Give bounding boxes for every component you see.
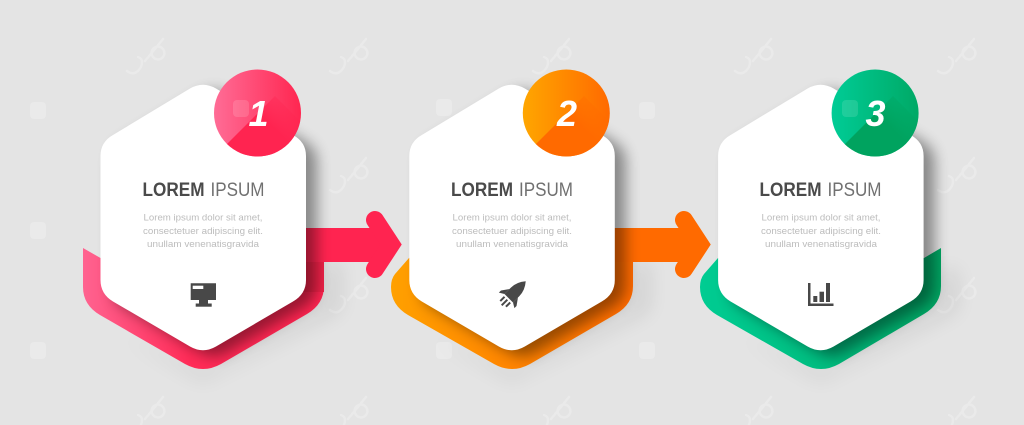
body text 1 — [143, 212, 263, 250]
body text 3: unullam venenatisgravida — [765, 239, 878, 250]
badge 2: 2 — [556, 93, 577, 134]
body text 1: consectetuer adipiscing elit. — [143, 226, 263, 237]
badge 3: 3 — [865, 93, 886, 134]
body text 3: consectetuer adipiscing elit. — [761, 226, 881, 237]
icon: rocket — [494, 273, 534, 313]
panel: card 3 — [718, 85, 924, 350]
panel: card 1 — [100, 85, 306, 350]
arrow 1 — [300, 220, 391, 269]
heading 2: IPSUM — [519, 179, 573, 201]
body text 1: Lorem ipsum dolor sit amet, — [144, 212, 262, 224]
body text 2: consectetuer adipiscing elit. — [452, 226, 572, 237]
step 1 band and arrow — [83, 220, 391, 380]
body text 3: Lorem ipsum dolor sit amet, — [762, 212, 880, 224]
heading 1: IPSUM — [210, 179, 264, 201]
body text 2: Lorem ipsum dolor sit amet, — [452, 212, 572, 224]
step 2 band and arrow — [391, 220, 700, 380]
heading 3 — [760, 179, 882, 201]
heading 3: IPSUM — [828, 179, 882, 201]
heading 1 — [142, 179, 264, 201]
body text 2: unullam venenatisgravida — [456, 239, 569, 250]
arrow 2 — [609, 220, 700, 269]
card shadows — [112, 91, 935, 356]
heading 1: LOREM — [142, 179, 204, 201]
badge 1: 1 — [248, 93, 269, 134]
heading 2 — [451, 179, 573, 201]
panel: card 2 — [409, 85, 615, 350]
step 3 band — [700, 248, 957, 380]
badge 1 — [214, 70, 301, 156]
body text 1: unullam venenatisgravida — [147, 239, 260, 250]
badge 2 — [522, 70, 610, 156]
icon: monitor — [191, 283, 216, 307]
badge 3 — [832, 70, 919, 156]
body text 2 — [452, 212, 572, 250]
heading 2: LOREM — [451, 179, 513, 201]
icon: bar chart — [808, 283, 834, 306]
body text 3 — [761, 212, 881, 250]
heading 3: LOREM — [760, 179, 822, 201]
